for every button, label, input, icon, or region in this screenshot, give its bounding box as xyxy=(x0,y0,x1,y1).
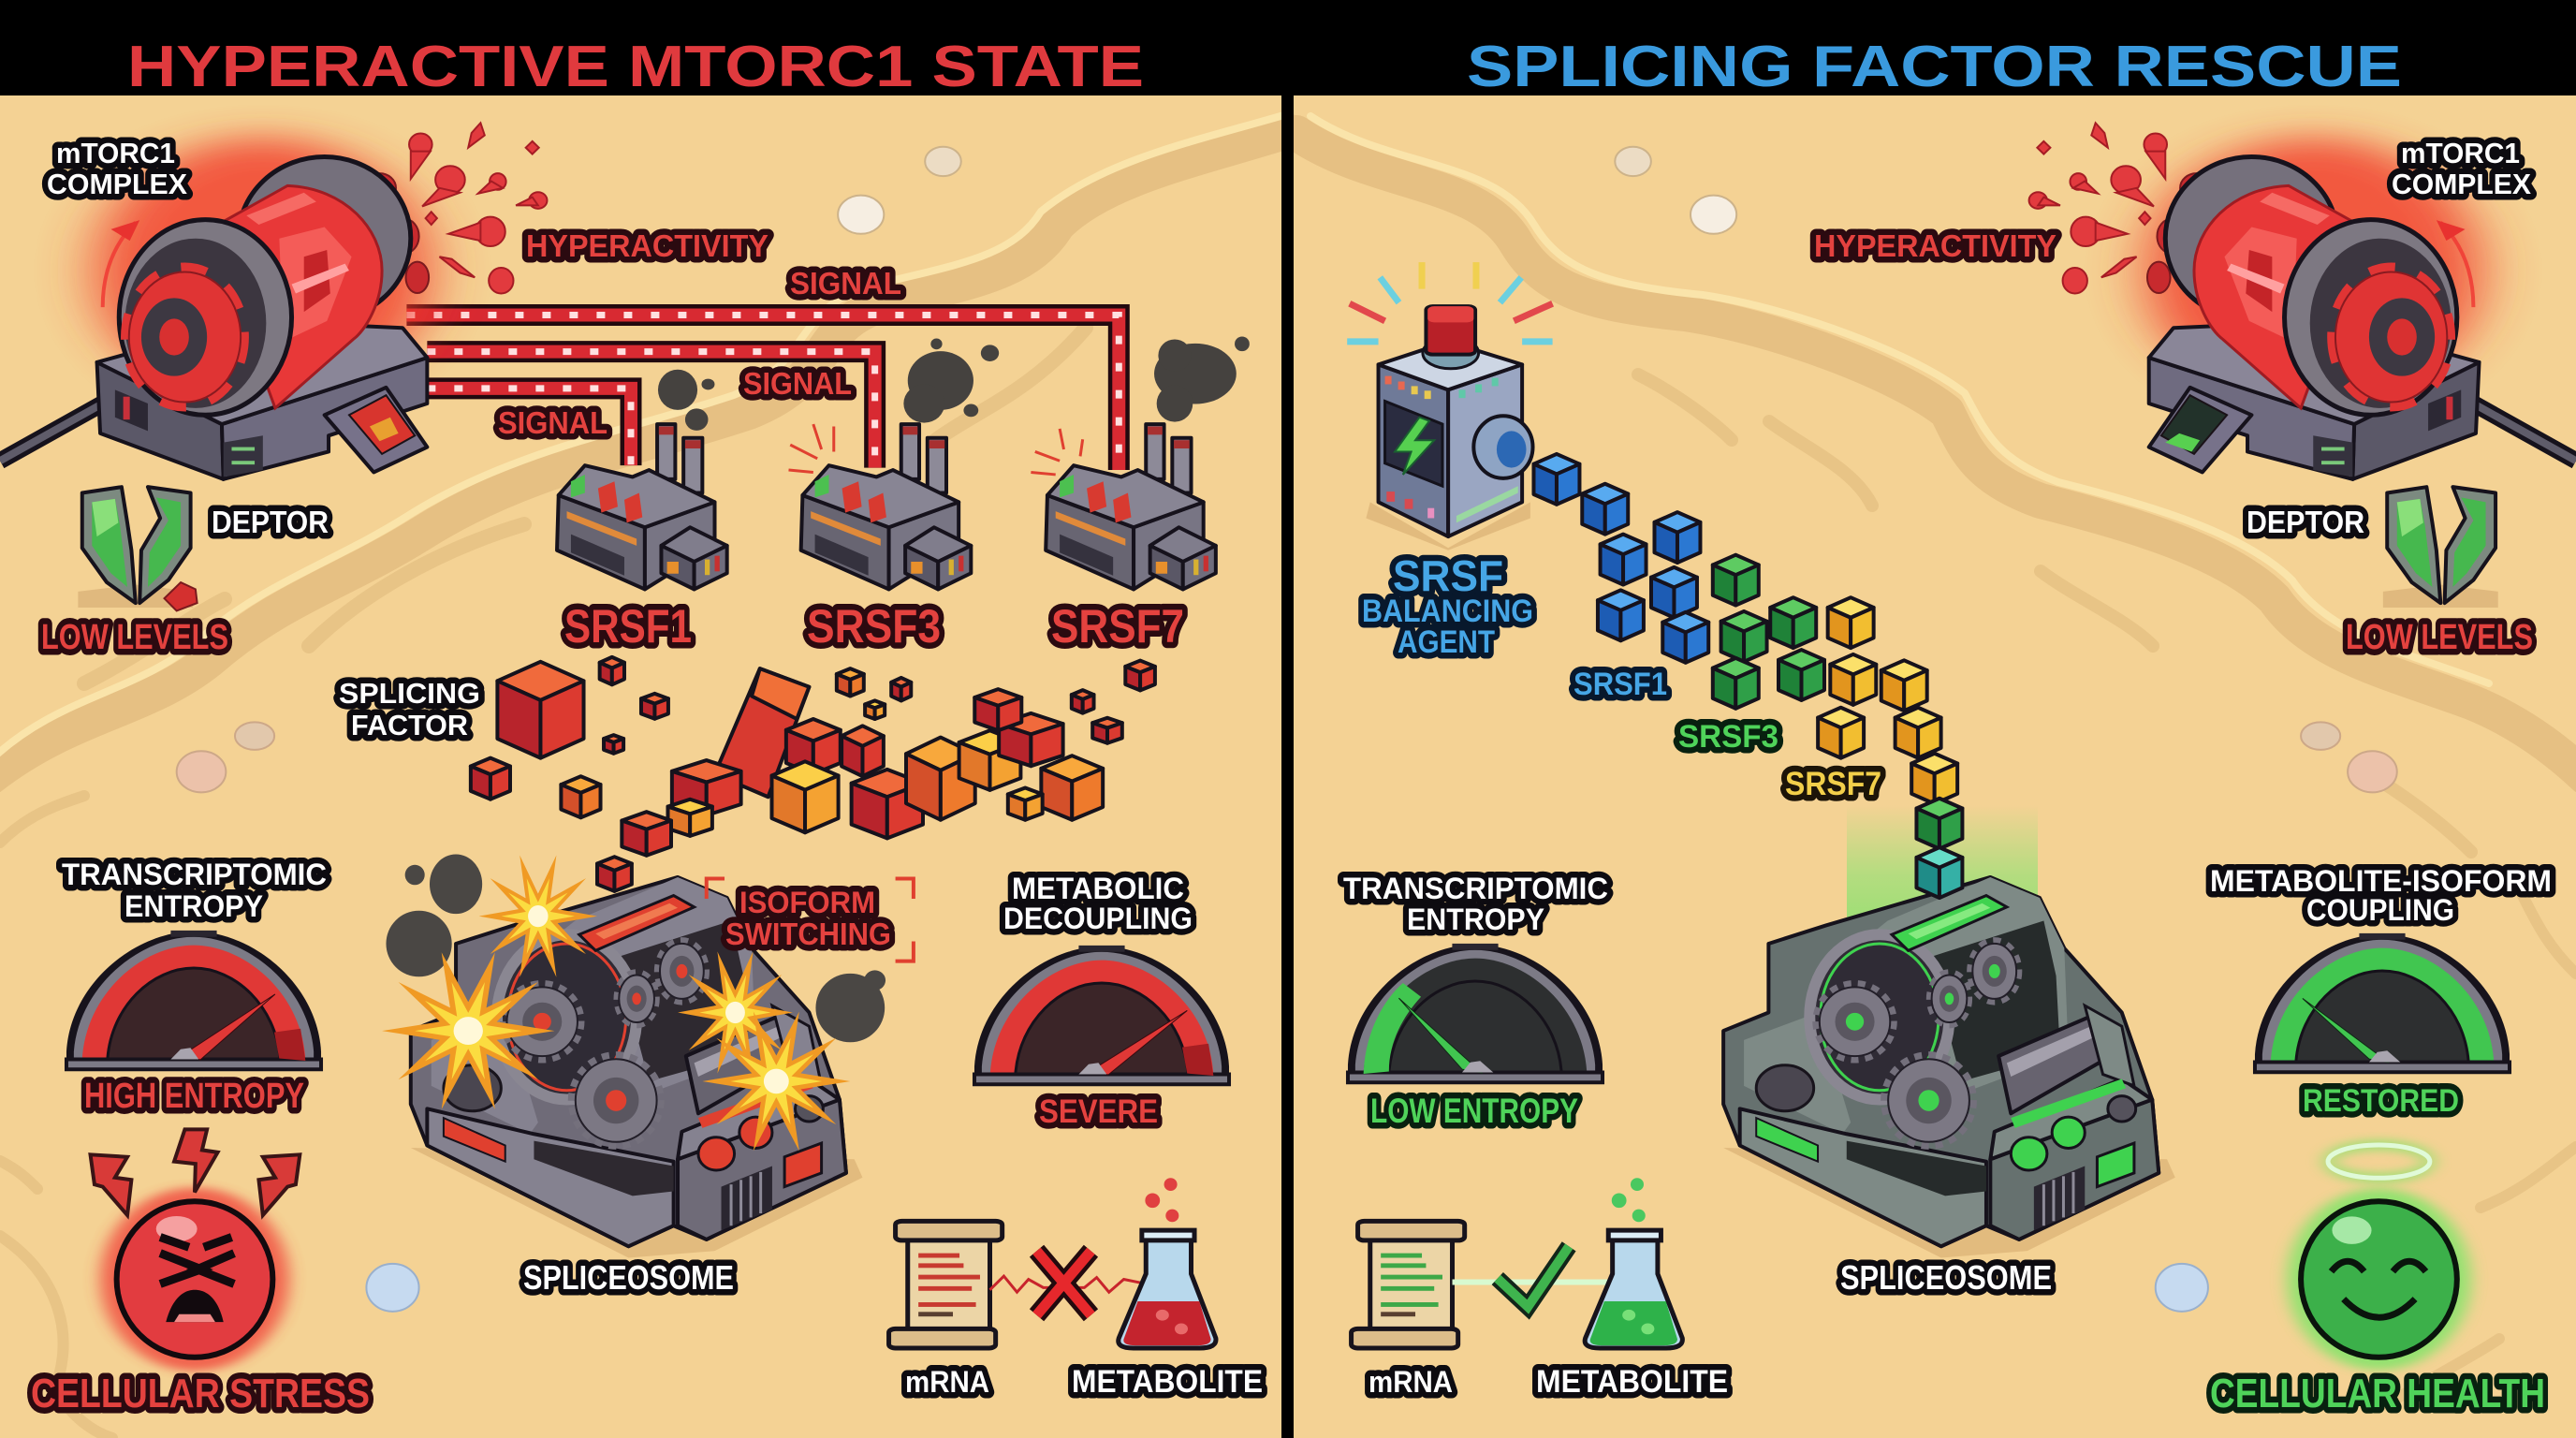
label: isoform switching xyxy=(725,886,891,951)
mTORC1 machine, mirrored xyxy=(2029,123,2576,479)
factory SRSF1 xyxy=(557,370,727,589)
label: SRSF balancing agent xyxy=(1362,551,1533,660)
icon: healthy cell face with halo xyxy=(2287,1145,2471,1371)
label: spliceosome: SPLICEOSOME xyxy=(523,1258,734,1297)
panel: splicing factor rescue xyxy=(1343,35,2576,1416)
label: transcriptomic entropy xyxy=(1343,872,1608,936)
rocks xyxy=(1615,147,2397,1312)
label: transcriptomic entropy: ENTROPY xyxy=(124,889,263,923)
icon: metabolite flask, green xyxy=(1585,1178,1682,1348)
labels: signal: SIGNAL xyxy=(743,366,852,401)
label: SRSF balancing agent: BALANCING xyxy=(1362,594,1533,629)
signal pipes xyxy=(406,315,1119,470)
broken link X between mRNA and metabolite xyxy=(990,1251,1142,1315)
splicing factor debris cubes xyxy=(471,657,1155,891)
title: hyperactive state: HYPERACTIVE MTORC1 STATE xyxy=(127,35,1144,99)
labels: signal xyxy=(498,266,901,440)
isoform switching target brackets xyxy=(707,878,914,961)
label: SRSF balancing agent: SRSF xyxy=(1393,551,1503,600)
label: SRSF3: SRSF3 xyxy=(1678,719,1778,755)
labels: signal: SIGNAL xyxy=(790,266,901,301)
green link with check mark xyxy=(1453,1246,1610,1307)
label: isoform switching: ISOFORM xyxy=(739,886,875,919)
header band xyxy=(0,0,2576,95)
label: DEPTOR: DEPTOR xyxy=(2247,505,2364,539)
label: splicing factor: FACTOR xyxy=(351,709,468,741)
label: SRSF7: SRSF7 xyxy=(1785,766,1881,802)
label: metabolite: METABOLITE xyxy=(1536,1364,1728,1400)
gauge: high entropy xyxy=(66,931,321,1070)
icon: mRNA scroll xyxy=(1352,1221,1465,1348)
label: splicing factor: SPLICING xyxy=(339,677,480,710)
title: splicing factor rescue: SPLICING FACTOR RESCUE xyxy=(1467,35,2402,99)
gauge: metabolic decoupling severe xyxy=(974,946,1229,1085)
label: hyperactivity: HYPERACTIVITY xyxy=(1814,228,2056,263)
labels: signal: SIGNAL xyxy=(498,405,607,440)
label: isoform switching: SWITCHING xyxy=(725,917,891,951)
label: hyperactivity: HYPERACTIVITY xyxy=(526,228,768,263)
factory SRSF7 xyxy=(1031,337,1250,589)
label: mTORC1 complex xyxy=(2392,137,2531,200)
SRSF cube stream xyxy=(1533,454,1957,804)
label: mTORC1 complex: COMPLEX xyxy=(47,168,187,200)
label: low entropy: LOW ENTROPY xyxy=(1370,1092,1578,1130)
label: SRSF balancing agent: AGENT xyxy=(1398,624,1495,660)
label: metabolite-isoform coupling: COUPLING xyxy=(2306,893,2454,927)
gauge: low entropy xyxy=(1348,944,1603,1083)
label: mRNA: mRNA xyxy=(1368,1365,1453,1399)
label: mTORC1 complex: COMPLEX xyxy=(2392,168,2531,200)
label: mTORC1 complex: mTORC1 xyxy=(2401,137,2520,169)
spliceosome, healthy xyxy=(1723,799,2175,1258)
label: spliceosome: SPLICEOSOME xyxy=(1840,1258,2052,1297)
label: DEPTOR: DEPTOR xyxy=(212,505,329,539)
factory SRSF3 xyxy=(788,338,999,589)
labels: SRSF factories: SRSF3 xyxy=(807,600,941,653)
label: transcriptomic entropy: TRANSCRIPTOMIC xyxy=(62,858,327,891)
label: mRNA: mRNA xyxy=(905,1365,989,1399)
labels: SRSF factories: SRSF7 xyxy=(1051,600,1184,653)
label: transcriptomic entropy: ENTROPY xyxy=(1407,902,1544,936)
icon: metabolite flask, red xyxy=(1119,1178,1216,1348)
label: severe: SEVERE xyxy=(1039,1093,1158,1130)
label: SRSF1: SRSF1 xyxy=(1573,667,1667,702)
SRSF balancing agent device xyxy=(1347,262,1553,550)
label: splicing factor xyxy=(339,677,480,741)
icon: mRNA scroll xyxy=(889,1221,1003,1348)
gauge: coupling restored xyxy=(2255,933,2510,1073)
icon: stressed cell face xyxy=(91,1129,300,1371)
label: metabolite: METABOLITE xyxy=(1072,1364,1263,1400)
label: low levels: LOW LEVELS xyxy=(41,618,228,657)
spliceosome, overheating xyxy=(382,854,886,1258)
label: low levels: LOW LEVELS xyxy=(2346,618,2533,657)
icon: DEPTOR shield, mirrored position xyxy=(2383,487,2498,608)
label: metabolite-isoform coupling xyxy=(2210,864,2552,927)
label: metabolic decoupling xyxy=(1003,872,1193,935)
label: metabolic decoupling: METABOLIC xyxy=(1012,872,1184,905)
label: restored: RESTORED xyxy=(2303,1083,2459,1119)
label: metabolic decoupling: DECOUPLING xyxy=(1003,902,1193,935)
labels: SRSF factories: SRSF1 xyxy=(564,600,692,653)
labels: SRSF factories xyxy=(564,600,1184,653)
rocks xyxy=(177,147,961,1312)
green beam into spliceosome xyxy=(1847,805,2038,922)
label: transcriptomic entropy: TRANSCRIPTOMIC xyxy=(1343,872,1608,905)
panel: hyperactive mTORC1 state xyxy=(0,35,1263,1416)
icon: broken DEPTOR shield xyxy=(78,487,198,610)
mTORC1 machine xyxy=(0,123,547,479)
label: mTORC1 complex xyxy=(47,137,187,200)
label: transcriptomic entropy xyxy=(62,858,327,923)
label: high entropy: HIGH ENTROPY xyxy=(84,1077,304,1116)
label: cellular stress: CELLULAR STRESS xyxy=(31,1371,370,1416)
label: mTORC1 complex: mTORC1 xyxy=(56,137,175,169)
label: metabolite-isoform coupling: METABOLITE-ISOFORM xyxy=(2210,864,2552,898)
